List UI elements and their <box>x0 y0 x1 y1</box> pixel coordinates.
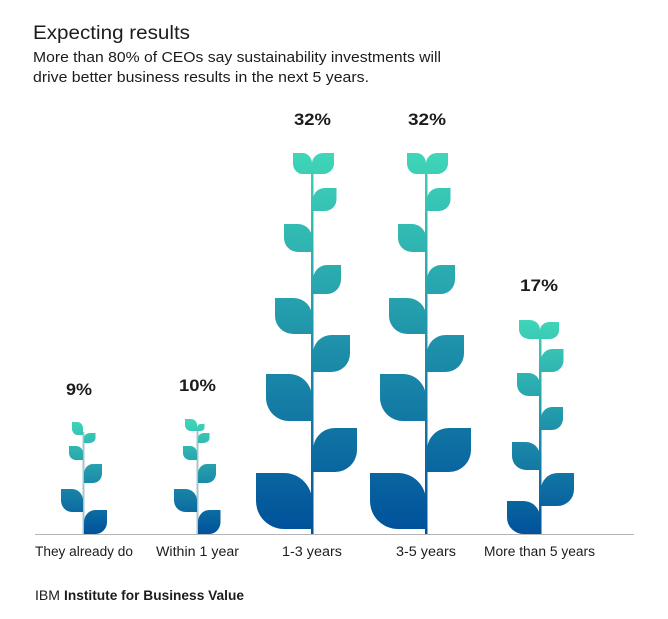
label: Within 1 year: Within 1 year <box>156 544 240 559</box>
plant: 1-3 years <box>256 153 357 534</box>
plant: More than 5 years <box>507 320 574 534</box>
label: They already do: They already do <box>35 544 133 559</box>
label: 3-5 years: 3-5 years <box>396 544 456 559</box>
plant: They already do <box>61 422 107 534</box>
title: Expecting results <box>33 22 190 44</box>
subtitle: More than 80% of CEOs say sustainability investments will <box>33 49 441 66</box>
value: 1-3 years 32%: 32% <box>294 111 331 129</box>
label: More than 5 years: More than 5 years <box>484 544 595 559</box>
subtitle: drive better business results in the next 5 years. <box>33 69 369 86</box>
plant: Within 1 year <box>174 419 220 534</box>
value: More than 5 years 17%: 17% <box>520 277 558 295</box>
plant: 3-5 years <box>370 153 471 534</box>
footer: IBM Institute for Business Value: IBM <box>35 588 60 603</box>
label: 1-3 years: 1-3 years <box>282 544 342 559</box>
value: They already do 9%: 9% <box>66 381 92 399</box>
baseline axis <box>35 534 634 535</box>
footer: IBM Institute for Business Value: Institute for Business Value <box>64 588 244 603</box>
value: Within 1 year 10%: 10% <box>179 377 216 395</box>
value: 3-5 years 32%: 32% <box>408 111 446 129</box>
